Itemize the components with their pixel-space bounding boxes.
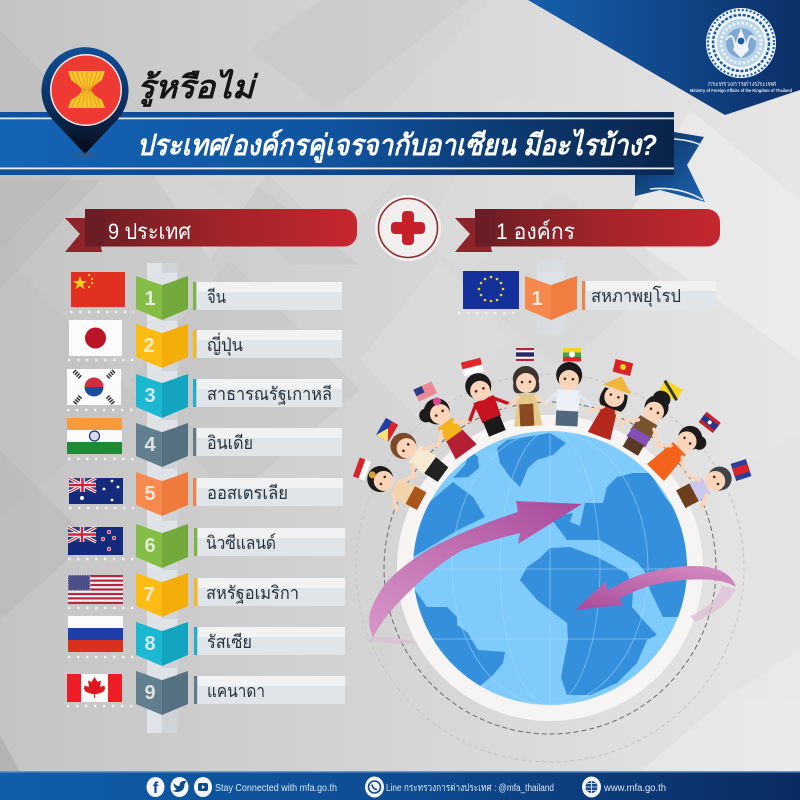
seal [706, 8, 776, 78]
top-right blue corner [528, 0, 800, 115]
cube 3 [136, 371, 188, 418]
pillar [147, 263, 178, 733]
cube: EU: 1 [531, 288, 543, 310]
label China [193, 282, 342, 310]
label Korea [193, 379, 342, 407]
label Russia: รัสเซีย [207, 632, 252, 652]
row 5 Australia [69, 469, 343, 516]
footer text: web: www.mfa.go.th [603, 783, 666, 794]
label New Zealand: นิวซีแลนด์ [206, 533, 276, 553]
label Canada: แคนาดา [207, 681, 265, 701]
EU row [458, 260, 716, 335]
orbit rings [356, 374, 744, 762]
label Russia [194, 627, 345, 655]
cube: EU [525, 260, 577, 335]
continents [414, 433, 687, 695]
cube 7 [136, 570, 188, 617]
flag: USA [68, 575, 134, 608]
flag: Russia [68, 616, 134, 657]
cube 5 [136, 469, 188, 516]
footer [0, 771, 800, 800]
label: EU: สหภาพยุโรป [591, 285, 681, 307]
label: EU [582, 281, 716, 310]
banner: 9 countries [65, 209, 357, 252]
flag: India [67, 418, 134, 459]
cube 9: 9 [144, 682, 156, 704]
label New Zealand [194, 528, 345, 556]
label Australia [193, 478, 343, 506]
banner: 1 organisation [455, 209, 720, 252]
label Korea: สาธารณรัฐเกาหลี [207, 384, 332, 405]
cube 4 [136, 420, 188, 467]
ASEAN children holding hands [353, 348, 751, 519]
flag: Japan [68, 320, 134, 360]
label Japan: ญี่ปุ่น [207, 332, 243, 356]
cube 8 [136, 619, 188, 666]
child: Vietnam [582, 359, 637, 442]
child: Singapore [455, 358, 517, 441]
footer text: social: Stay Connected with mfa.go.th [215, 783, 337, 794]
label USA: สหรัฐอเมริกา [206, 583, 299, 604]
row 6 New Zealand [68, 521, 345, 568]
label Australia: ออสเตรเลีย [207, 483, 288, 503]
child: Brunei [613, 380, 683, 461]
banner: 9 countries: 9 ประเทศ [108, 219, 191, 244]
label India: อินเดีย [207, 433, 253, 453]
label China: จีน [207, 287, 226, 307]
plus icon [375, 195, 441, 261]
row 4 India [67, 418, 342, 467]
ASEAN map pin [41, 47, 128, 157]
globe [397, 415, 703, 721]
cube 8: 8 [144, 633, 156, 655]
arrow: large purple [366, 501, 582, 644]
cube 1 [136, 273, 188, 320]
banner: 1 organisation: 1 องค์กร [496, 219, 575, 244]
row 3 Korea [67, 369, 342, 418]
cube 7: 7 [143, 584, 155, 606]
icon: facebook [146, 777, 164, 797]
ASEAN sheaves [68, 71, 105, 108]
child: Myanmar [545, 348, 592, 427]
cube 4: 4 [144, 434, 156, 456]
cube 6 [136, 521, 188, 568]
label USA [194, 578, 345, 606]
flag: South Korea [67, 369, 134, 410]
cube 2: 2 [143, 335, 155, 357]
label India [193, 428, 342, 456]
globe grid [432, 431, 667, 705]
row 9 Canada [67, 668, 345, 715]
cube 1: 1 [144, 288, 156, 310]
cube 9 [136, 668, 188, 715]
subtitle: ประเทศ/องค์กรคู่เจรจากับอาเซียน มีอะไรบ้าง? [137, 128, 657, 164]
child: Indonesia [353, 455, 431, 519]
child: Thailand [505, 348, 548, 427]
icon: facebook: f [153, 780, 159, 797]
seal caption: กระทรวงการต่างประเทศ [708, 81, 777, 88]
ministry seal and caption [690, 8, 792, 93]
cube 2 [136, 321, 188, 368]
cube 3: 3 [144, 385, 156, 407]
flag: New Zealand [68, 527, 134, 559]
arrow: small purple [575, 566, 736, 622]
title: รู้หรือไม่ [137, 68, 259, 107]
ribbon tail [635, 132, 705, 202]
flag: EU [458, 271, 519, 313]
row 8 Russia [68, 616, 345, 666]
row 7 USA [68, 570, 345, 617]
icon: youtube [194, 777, 212, 797]
child: Philippines [376, 418, 456, 491]
icon: line [365, 776, 384, 798]
cube 5: 5 [144, 483, 156, 505]
label Canada [194, 676, 345, 704]
flag: Canada [67, 674, 134, 706]
child: Malaysia [413, 381, 483, 463]
label Japan [193, 330, 342, 358]
flag: Australia [69, 478, 134, 508]
title ribbon [0, 112, 705, 202]
icon: web [582, 776, 601, 798]
row 2 Japan [68, 320, 342, 368]
row 1 China [70, 272, 342, 320]
child: Laos [643, 412, 721, 486]
footer text: line: Line กระทรวงการต่างประเทศ : @mfa_thailand [386, 783, 554, 794]
flag: China [70, 272, 134, 312]
cube 6: 6 [144, 535, 156, 557]
icon: twitter [170, 777, 188, 797]
child: Cambodia [672, 456, 751, 514]
